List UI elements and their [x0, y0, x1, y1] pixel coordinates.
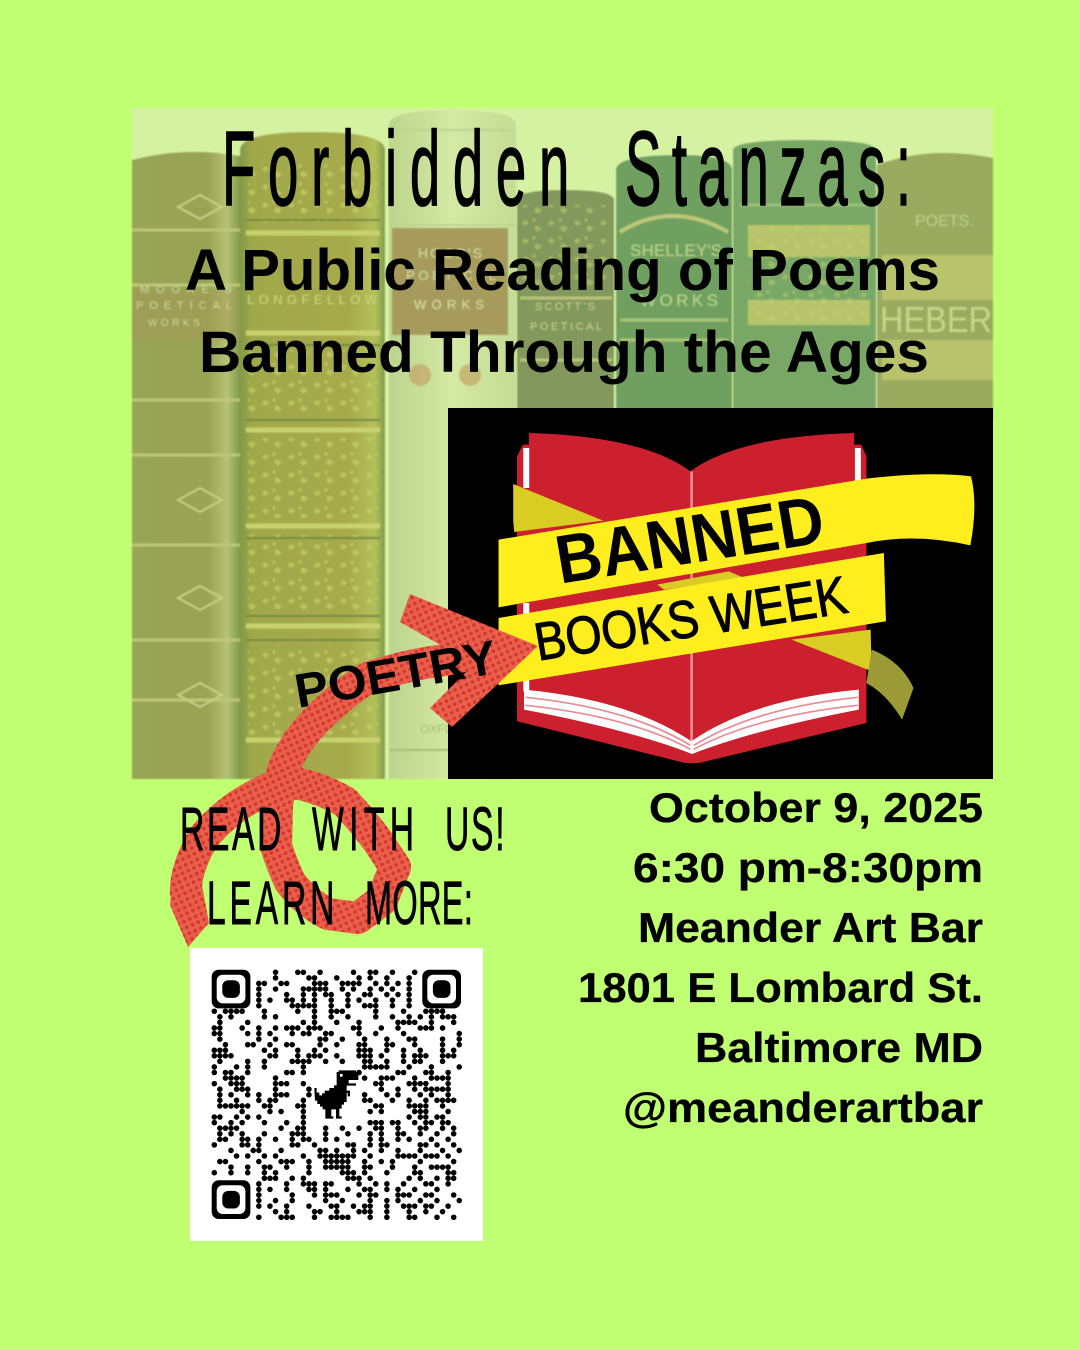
logo panel: Banned Books Week — [448, 408, 993, 779]
title: Forbidden Stanzas: Stanzas: — [625, 110, 922, 228]
book spine 1: MOORE'S — [140, 284, 232, 296]
red looping arrow — [170, 594, 538, 947]
icon: dinosaur — [314, 1070, 358, 1119]
book spine 7: HEBER — [880, 299, 992, 340]
book spine 1: POETICAL — [136, 300, 232, 312]
ribbon: BOOKS WEEK band: BOOKS WEEK — [530, 565, 851, 672]
event details — [578, 784, 983, 1131]
book spine 7: POETS. — [915, 213, 974, 230]
photo: row of old book spines — [132, 108, 993, 779]
QR modules — [214, 972, 460, 1217]
book spine 5: WORKS — [640, 291, 718, 310]
book spine 1 — [132, 152, 240, 779]
book spine 2: LONGFELLOW — [247, 292, 378, 307]
event details: Meander Art Bar — [638, 904, 983, 951]
book spine 1: WORKS. — [148, 318, 206, 329]
book spine 4: SCOTT'S — [535, 301, 595, 313]
book spine 3: HOOD'S — [418, 245, 482, 261]
title: Forbidden Stanzas: Forbidden — [222, 110, 582, 228]
book spine 5 — [616, 155, 732, 420]
call to action: WITH — [312, 794, 419, 864]
QR finder squares — [212, 970, 461, 1219]
book spine 3: POETICAL — [406, 268, 496, 283]
call to action: US! — [445, 794, 506, 864]
event details: @meanderartbar — [623, 1084, 983, 1131]
subtitle: A Public Reading of Poems — [185, 238, 940, 303]
subtitle: Banned Through the Ages — [199, 320, 929, 385]
event details: 1801 E Lombard St. — [578, 964, 983, 1011]
arrow label: POETRY: POETRY — [291, 631, 501, 719]
book spine 2 — [240, 132, 385, 779]
event details: October 9, 2025 — [649, 784, 983, 831]
event details: Baltimore MD — [695, 1024, 983, 1071]
ribbon: BANNED band: BANNED — [550, 481, 829, 598]
book spine 3: OXFO — [420, 722, 454, 736]
QR code — [190, 948, 483, 1241]
event details: 6:30 pm-8:30pm — [633, 844, 983, 891]
book spine 5: SHELLEY'S — [630, 241, 722, 260]
book spine 3 — [389, 110, 516, 779]
title: Forbidden Stanzas — [222, 110, 922, 228]
open red book — [499, 433, 974, 763]
call to action: LEARN — [207, 868, 338, 938]
call to action: MORE: — [365, 869, 473, 938]
subtitle — [185, 238, 940, 385]
ribbon: BANNED band — [499, 474, 974, 607]
book spine 3: WORKS — [414, 297, 484, 312]
book spine 4: POETICAL — [530, 321, 602, 333]
call to action — [180, 794, 506, 938]
call to action: READ — [180, 794, 284, 864]
book spine 4 — [517, 190, 614, 420]
book spine 6 — [733, 140, 876, 420]
ribbon: back folds — [513, 484, 914, 720]
book spine 7 — [877, 153, 993, 420]
